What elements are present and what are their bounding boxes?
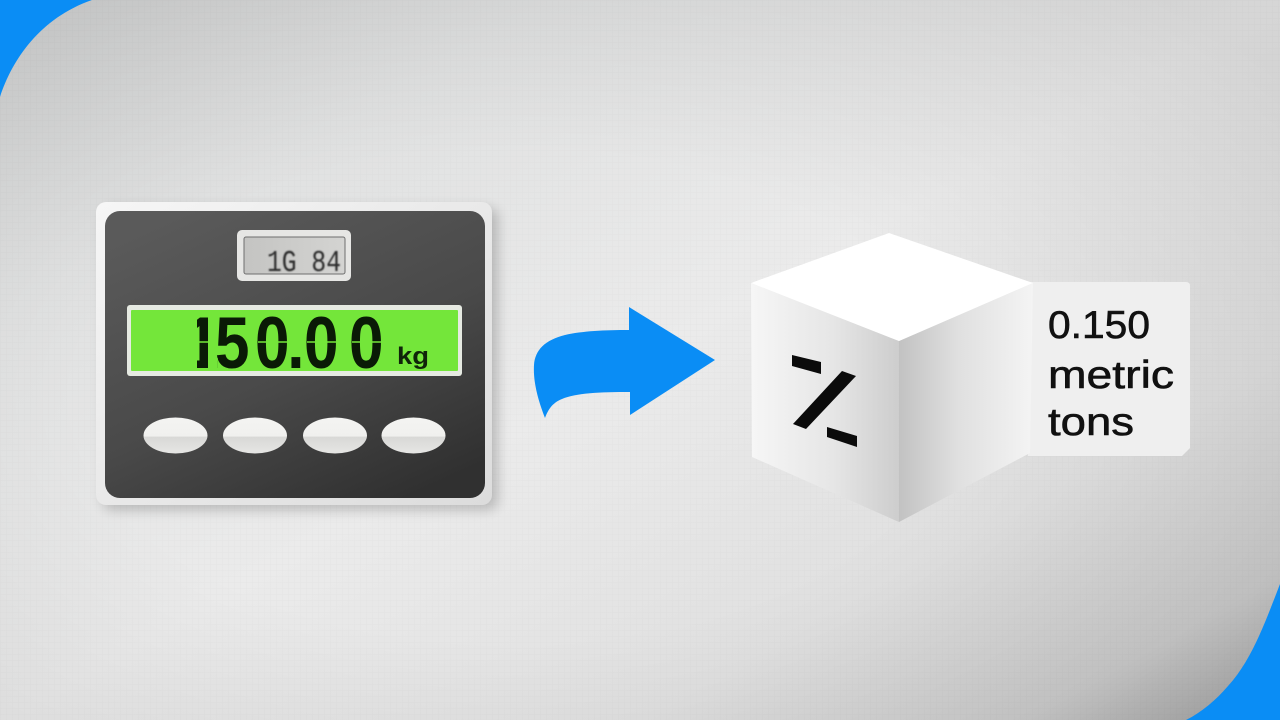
metric tons label: tons [1048, 401, 1134, 444]
main green display: 150.00 [185, 303, 384, 384]
scale dark face [105, 211, 485, 498]
cube top face [751, 233, 1033, 341]
scale buttons [144, 418, 446, 454]
cube right face [899, 283, 1033, 522]
metric tons label [1028, 282, 1190, 456]
hide serifs on the digit one and add segment gaps [184, 312, 218, 370]
cube logo [792, 355, 857, 447]
cube left face [751, 283, 899, 522]
small date display: 1G 84 [267, 246, 341, 281]
metric tons label: 0.150 [1048, 304, 1150, 347]
digital scale [96, 202, 498, 510]
arrow: conversion [534, 307, 715, 418]
main green display [127, 303, 462, 384]
white cube [751, 233, 1033, 522]
scale outer frame [96, 202, 492, 505]
metric tons label: metric [1048, 354, 1174, 397]
small date display [237, 230, 351, 281]
main green display: kg [397, 343, 429, 370]
